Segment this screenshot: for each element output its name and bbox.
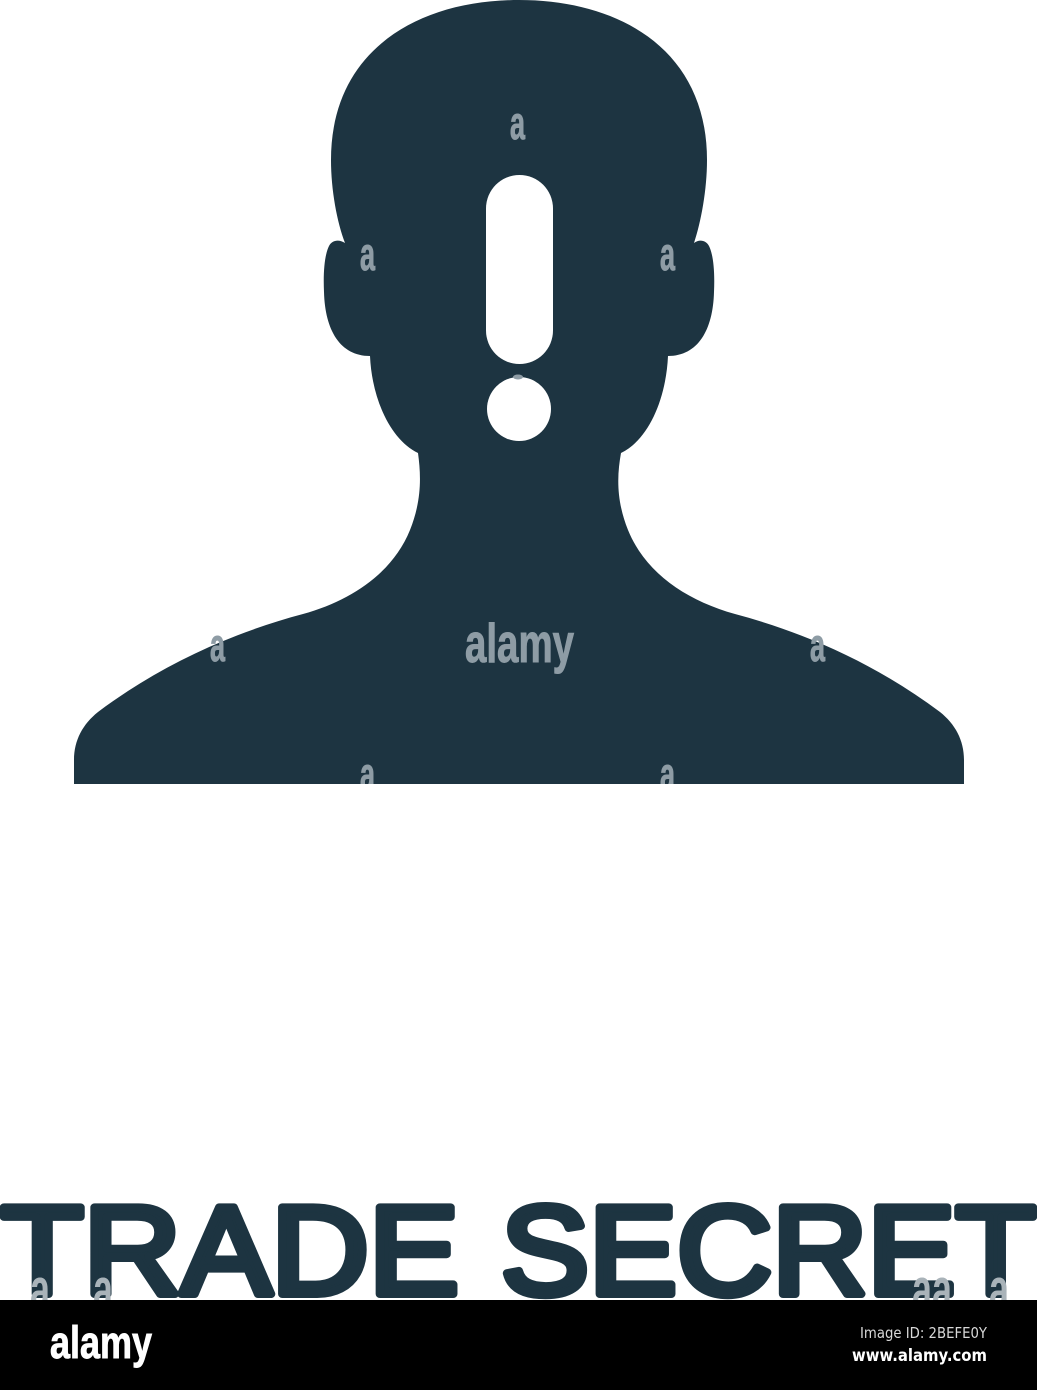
image id: Image ID: 2BEFE0Y [860,1324,988,1342]
watermark: alamy on silhouette: a [210,619,225,671]
watermark: alamy on silhouette: a [360,748,375,800]
watermark: alamy on silhouette: a [360,228,375,280]
title: TRADE [1,1180,459,1321]
watermark fragments on title: a [93,1256,113,1323]
exclamation dot [487,377,551,441]
title [1,1180,1036,1321]
website: www.alamy.com [852,1346,987,1365]
watermark fragments on title [30,1256,1009,1323]
footer bar [0,1300,1037,1390]
watermark fragments on title: aa [912,1256,952,1323]
exclamation bar [486,175,553,364]
watermark: alamy on silhouette: a [510,97,525,149]
silhouette [74,0,964,784]
title: SECRET [501,1180,1036,1321]
mask below silhouette [0,784,1037,804]
watermark: alamy on silhouette: a [810,619,825,671]
watermark: alamy on silhouette: a [660,228,675,280]
watermark: alamy on silhouette [210,97,825,800]
watermark: alamy on silhouette: a [660,748,675,800]
watermark fragments on title: a [30,1256,50,1323]
icon: person silhouette with exclamation mark [74,0,964,784]
watermark fragment above dot [513,374,523,380]
watermark fragments on title: a [989,1256,1009,1323]
watermark: alamy on silhouette: alamy [465,612,574,674]
footer logo: alamy [50,1317,152,1368]
